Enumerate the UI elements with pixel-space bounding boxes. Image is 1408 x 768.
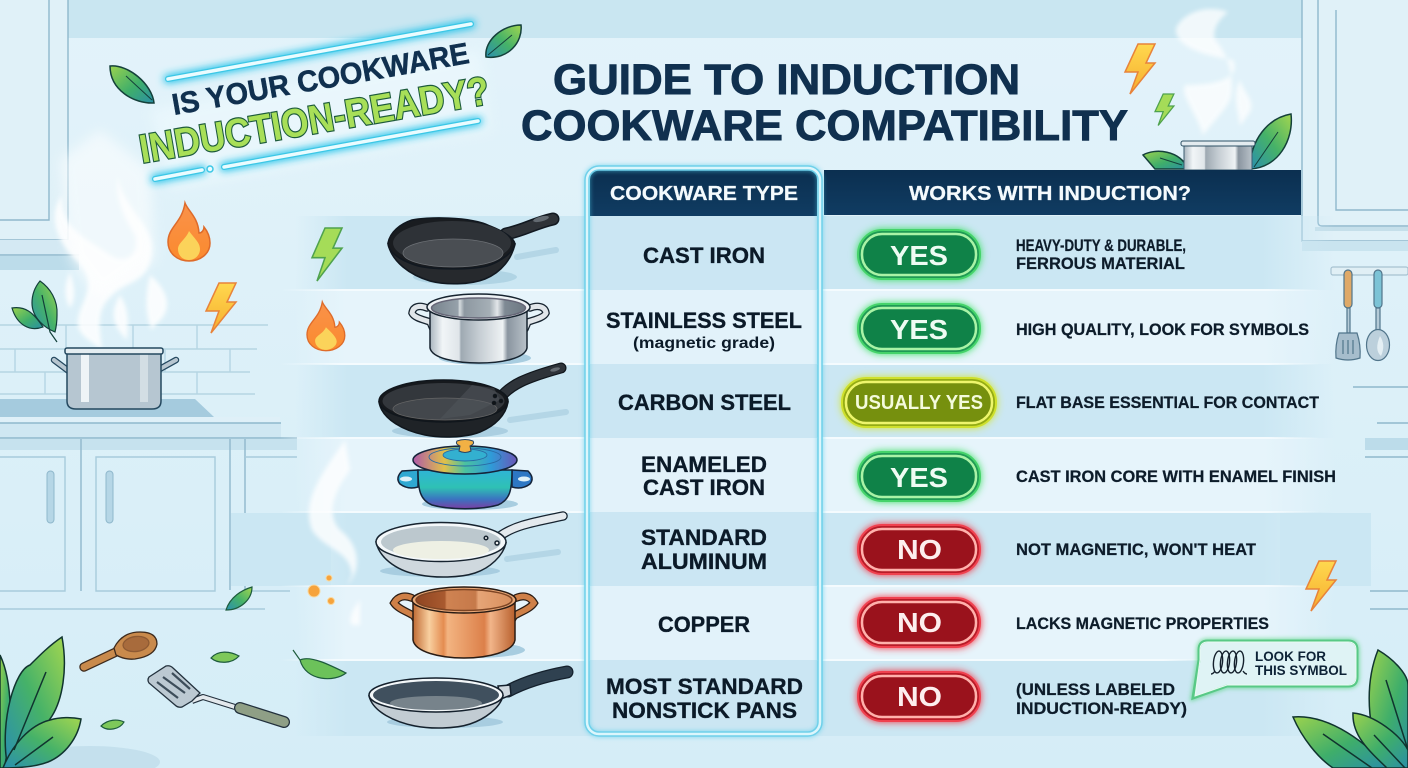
icon: top right pot and leaves <box>1143 114 1291 170</box>
pill: yes <box>857 303 981 354</box>
pan: standard aluminum <box>376 516 563 577</box>
pill: usually yes: USUALLY YES <box>855 392 983 414</box>
main title: GUIDE TO INDUCTION <box>553 56 1020 104</box>
row: copper <box>658 597 1269 648</box>
pill: usually yes <box>841 377 997 428</box>
callout: look for this symbol: LOOK FOR <box>1255 649 1326 664</box>
pill: no: NO <box>897 607 942 638</box>
row: enameled cast iron: ENAMELED <box>641 452 767 477</box>
row: enameled cast iron <box>641 451 1336 502</box>
pan: cast iron skillet <box>388 215 556 285</box>
row: carbon steel: FLAT BASE ESSENTIAL FOR CONTACT <box>1016 394 1319 412</box>
pill: yes: YES <box>890 240 948 271</box>
icon: plant bottom left <box>0 637 81 768</box>
column panel: cookware type: COOKWARE TYPE <box>610 183 798 205</box>
row: carbon steel <box>618 377 1319 428</box>
pill: no <box>857 524 981 575</box>
row: most standard nonstick pans: NONSTICK PANS <box>612 698 797 723</box>
row: stainless steel <box>606 303 1309 354</box>
pot: copper <box>394 587 534 658</box>
steam: left pot <box>55 175 167 350</box>
icon: leaf banner left <box>110 66 154 103</box>
row: standard aluminum: NOT MAGNETIC, WON'T HEAT <box>1016 541 1256 559</box>
row: standard aluminum: ALUMINUM <box>641 549 767 574</box>
title banner: is your cookware induction-ready <box>136 24 492 190</box>
main title <box>521 56 1128 150</box>
icon: small leaves on floor <box>101 587 346 729</box>
row: stainless steel: HIGH QUALITY, LOOK FOR SYMBOLS <box>1016 321 1309 339</box>
icon: coil symbol <box>1211 651 1247 674</box>
icon: flame small <box>307 302 345 351</box>
steam: center floor <box>309 440 360 625</box>
row: cast iron <box>643 229 1186 280</box>
pill: yes <box>857 451 981 502</box>
icon: plant bottom right <box>1293 650 1408 768</box>
pill: yes <box>857 229 981 280</box>
row: copper: COPPER <box>658 612 750 637</box>
pan: carbon steel <box>379 366 566 438</box>
callout: look for this symbol <box>1193 641 1357 698</box>
top right steam <box>1176 9 1251 135</box>
row: cast iron: FERROUS MATERIAL <box>1016 255 1185 273</box>
table panel <box>587 168 1301 734</box>
row: standard aluminum <box>641 524 1256 575</box>
row bands <box>280 216 1335 736</box>
row: cast iron: CAST IRON <box>643 243 765 268</box>
icon: yellow bolt left <box>206 283 236 333</box>
icon: leaves left <box>12 281 57 342</box>
row: cast iron: HEAVY-DUTY & DURABLE, <box>1016 237 1186 255</box>
pill: no <box>857 671 981 722</box>
column panel: cookware type <box>587 168 820 734</box>
pill: no: NO <box>897 681 942 712</box>
pill: no: NO <box>897 534 942 565</box>
row: carbon steel: CARBON STEEL <box>618 390 791 415</box>
icon: green bolt top right <box>1155 94 1174 126</box>
pill: no <box>857 597 981 648</box>
icon: flame left <box>168 203 210 261</box>
row: most standard nonstick pans: INDUCTION-READY) <box>1016 700 1187 718</box>
icon: spatula <box>148 666 284 722</box>
icon: yellow bolt top right <box>1125 44 1155 94</box>
row: enameled cast iron: CAST IRON <box>643 475 765 500</box>
pot: enameled cast iron <box>398 440 532 510</box>
row: most standard nonstick pans: (UNLESS LABELED <box>1016 681 1175 699</box>
icon: leaf banner right <box>486 25 521 57</box>
banner heading line 2: INDUCTION-READY? <box>136 69 492 172</box>
row: standard aluminum: STANDARD <box>641 525 767 550</box>
header bar: works with induction <box>824 170 1301 215</box>
icon: wooden spoon <box>84 632 157 667</box>
row: copper: LACKS MAGNETIC PROPERTIES <box>1016 615 1269 633</box>
header bar: works with induction: WORKS WITH INDUCTION? <box>909 183 1191 205</box>
icon: yellow bolt right <box>1306 561 1336 611</box>
row: most standard nonstick pans: MOST STANDARD <box>606 674 803 699</box>
row: stainless steel: (magnetic grade) <box>633 335 775 352</box>
callout: look for this symbol: THIS SYMBOL <box>1255 663 1347 678</box>
icon: hanging utensils <box>1331 267 1408 360</box>
row: stainless steel: STAINLESS STEEL <box>606 308 802 333</box>
main title: COOKWARE COMPATIBILITY <box>521 102 1128 150</box>
pan: nonstick <box>369 672 567 728</box>
row: enameled cast iron: CAST IRON CORE WITH ENAMEL FINISH <box>1016 468 1336 486</box>
pill: yes: YES <box>890 314 948 345</box>
banner heading line 1: IS YOUR COOKWARE <box>169 37 472 122</box>
pill: yes: YES <box>890 462 948 493</box>
row: most standard nonstick pans <box>606 671 1187 723</box>
pot: left stove <box>54 348 176 409</box>
sparks <box>308 575 334 604</box>
pot: stainless steel <box>412 294 546 365</box>
icon: green bolt left <box>312 228 342 281</box>
